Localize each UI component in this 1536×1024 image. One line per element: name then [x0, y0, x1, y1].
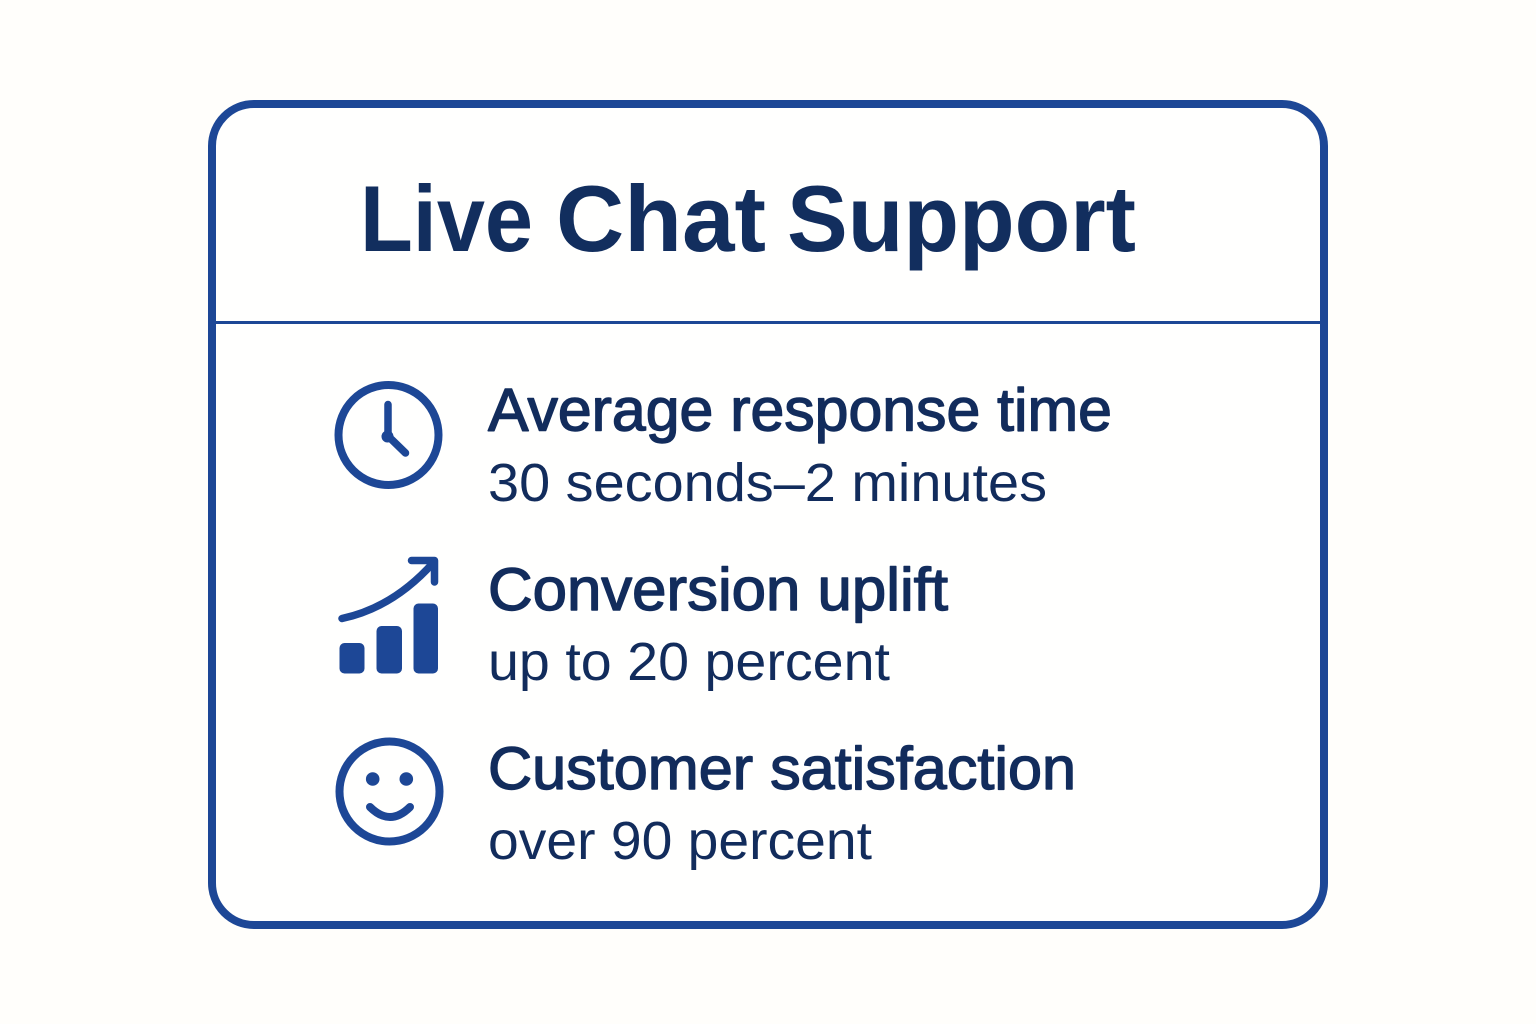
title: Live	[360, 166, 533, 271]
title: Support	[787, 166, 1136, 271]
row: average response time	[338, 376, 1112, 513]
icon: rising bar chart with arrow	[340, 560, 438, 674]
panel: live chat support card	[212, 104, 1324, 925]
value: up to 20 percent: up to 20 percent	[488, 632, 890, 692]
title: Chat	[556, 166, 766, 271]
heading: conversion uplift: Conversion uplift	[488, 556, 948, 623]
value: 30 seconds–2 minutes: 30 seconds–2 minutes	[488, 453, 1047, 513]
icon: smiley face	[340, 742, 440, 842]
heading: customer satisfaction: Customer satisfaction	[488, 735, 1076, 802]
value: over 90 percent: over 90 percent	[488, 811, 872, 871]
icon: clock	[338, 385, 438, 485]
heading: average response time: Average response time	[488, 376, 1112, 444]
title	[360, 166, 1136, 271]
row: conversion uplift	[340, 556, 948, 692]
row: customer satisfaction	[340, 735, 1076, 871]
